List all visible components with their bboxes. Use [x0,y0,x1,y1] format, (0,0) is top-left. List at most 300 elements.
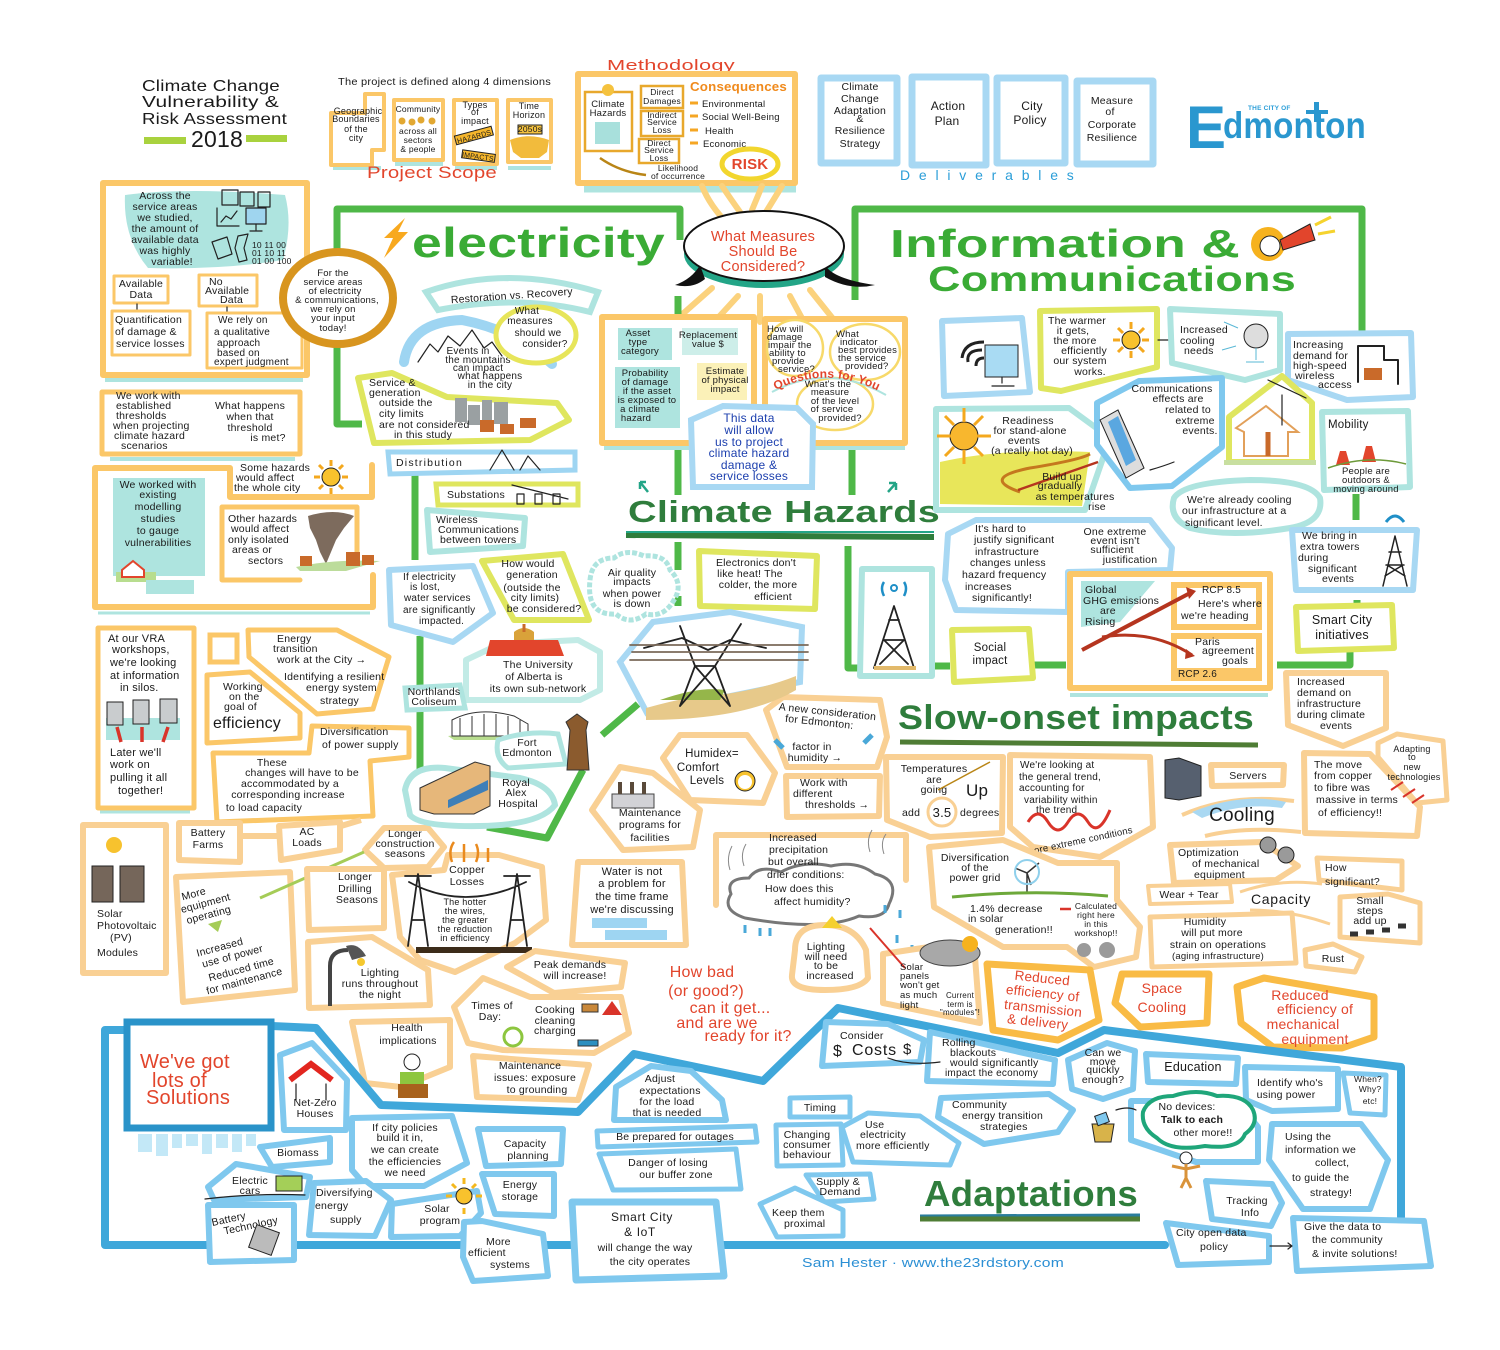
panel: hazards across city: to gauge [137,525,179,537]
panel: high-speed wireless: Increasing [1293,339,1343,351]
panel: how would generation: be considered? [507,603,581,615]
panel: if electricity is lost: If electricity [403,572,456,583]
label: smart city initiatives: Smart City [1312,613,1373,627]
panel: capacity planning: planning [507,1150,549,1162]
label: community energy transition: Community [952,1099,1007,1111]
panel: warmer efficiency: works. [1073,366,1106,378]
panel: service and generation: Service & [369,377,416,389]
label: royal alex hospital [405,762,555,826]
panel: smart city and IoT: will change the way [597,1242,693,1254]
panel: move copper to fibre: massive in terms [1316,794,1398,806]
panel: humidity strain: will put more [1180,927,1243,939]
panel: project scope: & people [400,144,436,154]
label: community energy transition: energy transition [962,1110,1043,1122]
rays from methodology to question bubble [678,186,834,322]
panel: talk behind blue box [1131,1092,1258,1162]
panel: warmer efficiency: our system [1053,355,1107,367]
panel: lighting increased [792,916,868,990]
panel: diversification grid [929,840,1140,967]
icon: tower [860,569,932,676]
panel: humidity strain: Humidity [1184,916,1227,928]
panel: lighting increased: to be [814,960,838,972]
band: distribution [388,450,575,474]
panel: readiness: events [1008,435,1040,447]
panel: hazards across city: areas or [232,544,272,556]
panel: hazards across city [95,460,380,613]
panel: optimization: of mechanical [1192,858,1259,870]
panel: copper losses tower: in efficiency [440,933,490,943]
panel: solar panels light [870,928,980,1023]
panel: warmer efficiency: The warmer [1048,315,1106,327]
panel: diversification grid: generation!! [995,924,1053,936]
label: changing consumer behaviour: behaviour [783,1149,831,1161]
panel: data availability: variable! [151,256,193,268]
panel: humidex [663,735,775,803]
panel: service and generation: are not considered [379,419,470,431]
panel: thresholds: thresholds [116,410,166,422]
panel: hard to justify: changes unless [970,557,1046,569]
band: distribution: Distribution [396,457,462,469]
title: Climate Change [142,78,280,95]
panel: temperatures [886,757,1003,837]
panel: mobility: moving around [1333,484,1399,495]
adaptations frame [105,1008,1401,1245]
panel: energy transition: Energy [277,633,312,645]
panel: hard to justify: It's hard to [975,523,1026,535]
label: cooling: Cooling [1209,805,1275,826]
panel: questions for you: Probability [622,368,668,379]
label: consider costs: Costs [852,1042,897,1059]
panel: reduced efficiency transmission: & delivery [1006,1011,1069,1033]
panel: project scope: IMPACTS [461,152,494,163]
panel: how significant: significant? [1325,876,1380,888]
label: education [1146,1054,1238,1084]
speech bubble: what measures: Should Be [729,244,797,260]
panel: solar panels light: Current [946,991,975,1000]
panel: data availability: 01 10 11 [252,248,286,258]
panel: data availability: expert judgment [214,357,289,368]
panel: readiness: Build up [1042,471,1082,483]
panel: already cooling [1173,480,1320,533]
panel: questions for you: measure [811,387,849,398]
callout: your input circle: of electricity [309,286,362,297]
panel: data availability: Data [130,289,152,301]
panel: deliverables: Plan [935,114,959,128]
panel: increased cooling needs: needs [1184,345,1214,357]
panel: hazards across city: only isolated [228,534,289,546]
panel: solar PV modules: Solar [97,908,123,920]
bubble: no devices: Talk to each [1161,1114,1223,1126]
label: efficiency [207,672,300,743]
panel: increased demand infrastructure: during climate [1297,709,1365,721]
panel: service and generation: outside the [379,397,433,409]
heading: information and communications [890,217,1335,299]
panel: GHG emissions chart: Paris [1195,636,1220,648]
label: northlands coliseum: Coliseum [411,696,457,708]
label: consider costs: Consider [840,1030,884,1042]
panel: wireless communications [427,510,525,552]
heading: electricity: electricity [412,219,666,266]
callout: this data will allow: climate hazard [709,446,789,460]
panel: energy transition: energy system [306,682,377,694]
panel: communications effects phone: effects are [1152,393,1204,405]
label: be prepared: Be prepared for outages [616,1131,734,1143]
panel: methodology: Indirect [647,110,677,120]
label: efficiency: goal of [224,701,257,713]
label: biomass [260,1138,330,1167]
panel: capacity planning: Capacity [504,1138,547,1150]
panel: health implications: implications [379,1035,437,1047]
callout: how bad: can it get... [690,1000,770,1017]
panel: solar PV modules: Modules [97,947,138,959]
callout: how bad: How bad [670,964,734,981]
panel: net-zero houses: Net-Zero [293,1097,337,1109]
callout: how bad: and are we [676,1015,758,1032]
callout: this data will allow: will allow [723,423,774,437]
panel: wireless communications: Wireless [436,514,478,526]
panel: space cooling: Cooling [1138,999,1186,1015]
label: social impact: Social [974,642,1006,654]
panel: new consideration: for Edmonton: [785,713,854,732]
panel: electronics heat [699,551,817,609]
panel: restoration vs recovery: Restoration vs. Recovery [450,286,574,306]
panel: thresholds work [786,776,880,817]
label: danger buffer zone [599,1149,741,1190]
label: rust: Rust [1322,953,1344,965]
callout: your input circle: we rely on [309,304,356,315]
panel: project scope: 2050s [518,124,542,134]
panel: project scope: Geographic [334,106,383,116]
panel: reduced efficiency transmission: efficiency of [1005,982,1080,1005]
panel: water frame: a problem for [598,878,666,890]
panel: university of alberta [466,624,600,700]
label: city open data policy [1166,1223,1292,1265]
logo: City of Edmonton [1186,94,1366,161]
panel: net-zero houses: Houses [297,1108,333,1120]
panel: water frame: Water is not [602,866,662,878]
callout: your input circle: & communications, [295,295,379,306]
panel: questions for you: Replacement [679,330,737,341]
callout: this data will allow [691,406,813,487]
label: fort edmonton [497,714,589,770]
panel: wireless communications: Communications [438,524,519,536]
panel: readiness: gradually [1038,480,1083,492]
panel: lighting increased: will need [804,951,847,963]
panel: hard to justify: infrastructure [975,546,1039,558]
panel: we've got lots of solutions: Solutions [146,1087,230,1109]
band: substations [436,484,578,505]
panel: GHG emissions chart: goals [1222,655,1248,667]
label: use electricity efficiently: electricity [860,1129,907,1141]
panel: hazards across city: We worked with [120,479,196,491]
panel: warmer efficiency: it gets, [1057,325,1089,337]
panel: project scope: Time [519,101,539,111]
callout: this data will allow: damage & [721,458,777,472]
callout: your input circle: For the [317,268,349,279]
panel: readiness: (a really hot day) [991,445,1073,457]
panel: how would generation [482,554,589,620]
panel: VRA workshops: Later we'll [110,747,161,759]
panel: thresholds [102,390,300,459]
label: smart city initiatives: initiatives [1315,628,1369,642]
panel: if city policies: the efficiencies [369,1156,441,1168]
panel: copper losses tower [392,842,546,972]
panel: GHG emissions chart: Rising [1085,616,1115,628]
panel: more equipment operating: for maintenance [205,965,284,997]
panel: adapting to new technologies: new [1403,762,1421,772]
panel: methodology: Health [705,126,734,137]
panel: questions for you: best provides [838,345,897,356]
label: longer construction seasons: Longer [388,828,422,840]
panel: humidity strain: (aging infrastructure) [1172,951,1264,962]
panel: new consideration: humidity → [788,752,842,764]
panel: increased precipitation cloud [716,830,912,953]
panel: warmer efficiency [1040,309,1172,391]
title: Risk Assessment [142,111,287,128]
panel: deliverables: & [856,113,864,125]
label: can we move quickly: move [1090,1056,1116,1068]
label: consider costs: $ [833,1043,842,1060]
panel: questions for you: of the level [811,396,859,407]
icon: tornado [296,512,380,571]
panel: methodology: Service [647,117,677,127]
label: rolling blackouts: Rolling [942,1037,976,1049]
panel: questions for you: of physical [701,375,749,386]
label: keep them proximal [760,1188,843,1237]
panel: data availability: was highly [138,245,191,257]
panel: questions for you: Asset [626,328,651,339]
panel: reduced efficiency mechanical: Reduced [1271,987,1329,1003]
panel: using the information [1269,1124,1388,1209]
panel: energy transition: work at the City → [276,654,366,666]
panel: GHG emissions chart: Here's where [1198,598,1262,610]
panel: deliverables: Climate [842,81,878,93]
panel: diversification grid: 1.4% decrease [970,903,1043,915]
panel: adjust expectations: Adjust [645,1073,675,1085]
panel: how would generation: city limits) [511,592,559,604]
panel: project scope: Project Scope [367,163,497,182]
panel: if electricity is lost: is lost, [410,582,440,593]
panel: battery technology: Battery [211,1210,247,1229]
panel: solar PV modules [83,825,166,973]
panel: readiness: as temperatures [1036,491,1114,503]
panel: health implications [352,1020,450,1098]
title: Vulnerability & [142,94,279,111]
panel: move copper to fibre: of efficiency!! [1318,807,1382,819]
panel: data availability [103,183,307,380]
panel: project scope [331,77,551,182]
panel: lighting at night: the night [359,989,401,1001]
panel: questions for you: type [629,337,647,348]
panel: increased cooling needs: cooling [1180,335,1215,347]
label: longer drilling seasons: Longer [338,871,372,883]
label: diversification and load capacity: changes will have to be [245,767,359,779]
cloud: air quality [590,552,678,620]
bubble: what measures: measures [507,316,553,327]
label: northlands coliseum [405,685,532,740]
panel: questions for you: of service [811,404,853,415]
icon: person [1172,1152,1200,1188]
panel: deliverables: Adaptation [834,105,886,117]
panel: water frame [572,862,686,945]
label: diversification and load capacity: These [257,757,287,769]
callout: your input circle: your input [311,313,355,324]
label: danger buffer zone: Danger of losing [628,1157,708,1169]
panel: high-speed wireless [1288,333,1413,400]
panel: university of alberta: its own sub-network [490,683,587,695]
label: timing: Timing [804,1102,836,1114]
panel: reduced efficiency mechanical [1237,978,1374,1048]
panel: GHG emissions chart: we're heading [1180,610,1249,622]
speech bubble: what measures: Considered? [721,259,805,275]
panel: humidity strain [1150,913,1296,967]
panel: energy storage: Energy [503,1179,538,1191]
panel: if city policies: build it in, [377,1132,423,1144]
bubble: what measures: should we [515,328,562,339]
label: electric cars: Electric [232,1175,268,1187]
panel: smart city and IoT [572,1202,724,1280]
panel: deliverables: of [1105,106,1115,118]
panel: diversification grid: power grid [949,872,1001,884]
label: timing [790,1097,850,1117]
label: royal alex hospital: Royal [502,777,530,789]
panel: house antenna [1224,376,1316,465]
panel: optimization [1170,837,1298,883]
text: one extreme event: justification [1102,554,1157,566]
label: diversification and load capacity: of power supply [322,739,399,751]
panel: times of day: charging [534,1025,576,1037]
panel: energy transition: Identifying a resilient [284,671,384,683]
panel: methodology: Damages [643,96,681,106]
panel: if city policies: we can create [370,1144,439,1156]
label: identify who is using power [1245,1067,1338,1111]
panel: VRA workshops: we're looking [109,657,176,669]
panel: increased precipitation cloud: Increased [769,832,817,844]
label: can we move quickly: Can we [1085,1047,1121,1059]
panel: methodology: Loss [653,125,671,135]
label: peak demands [507,951,625,993]
panel: VRA workshops: at information [110,670,179,682]
panel: mountains: what happens [457,371,522,382]
label: can we move quickly: quickly [1086,1064,1120,1076]
panel: GHG emissions chart: RCP 2.6 [1178,669,1217,680]
panel: smart city and IoT: Smart City [611,1210,673,1224]
panel: questions for you: ability to [769,348,806,359]
label: longer construction seasons [365,828,444,868]
panel: give the data: Give the data to [1304,1221,1381,1233]
panel: if electricity is lost: impacted. [419,616,464,627]
panel: project scope: city [349,133,363,143]
label: biomass: Biomass [277,1147,319,1159]
label: use electricity efficiently [842,1113,959,1165]
title [142,78,287,152]
panel: thresholds work: different [793,788,833,800]
panel: university of alberta: The University [503,659,573,671]
panel: deliverables: Resilience [1087,132,1137,144]
label: keep them proximal: proximal [784,1218,825,1230]
panel: reduced efficiency mechanical: efficiency of [1277,1001,1353,1017]
panel: deliverables: Resilience [835,125,885,137]
panel: battery technology: Technology [223,1214,280,1238]
panel: increased precipitation cloud: drier conditions: [767,869,845,881]
panel: questions for you: hazard [621,413,651,424]
panel: methodology: Likelihood [658,163,698,173]
callout: your input circle: today! [319,323,347,334]
panel: diversifying energy supply: Diversifying [316,1187,373,1199]
panel: maintenance issues: to grounding [507,1084,567,1096]
panel: solar panels light: as much [900,990,937,1001]
panel: VRA workshops: work on [109,759,150,771]
panel: project scope: across all [399,126,437,136]
panel: temperatures: Up [966,781,988,800]
panel: communications effects phone: related to [1165,404,1211,416]
label: be prepared [597,1126,757,1147]
panel: small steps: Small [1356,895,1384,907]
panel: university of alberta: of Alberta is [505,671,563,683]
panel: new consideration: A new consideration [778,701,877,723]
panel: how would generation: (outside the [503,582,561,594]
panel: increased precipitation cloud: but overall [768,856,819,868]
panel: questions for you: a climate [620,404,660,415]
panel: methodology [578,57,796,189]
panel: optimization: Optimization [1178,847,1239,859]
panel: battery technology [208,1203,294,1262]
panel: maintenance issues: Maintenance [499,1060,561,1072]
panel: using the information: strategy! [1310,1187,1352,1199]
panel: mountains: in the city [468,380,512,391]
panel: energy storage [482,1174,554,1216]
panel: adapting to new technologies: Adapting [1393,744,1431,754]
panel: data availability: We rely on [218,315,268,326]
callout: your input circle [283,252,393,344]
icon: silos [107,699,177,725]
label: consider costs: $ [903,1041,912,1058]
panel: project scope: Community [396,104,441,114]
logo: City of Edmonton: THE CITY OF [1248,105,1291,112]
panel: how significant: How [1325,862,1347,874]
panel: questions for you: provide [772,356,805,367]
label: changing consumer behaviour: consumer [783,1139,831,1151]
heading: climate hazards: Climate Hazards [628,494,940,529]
panel: increased demand infrastructure: demand on [1297,687,1351,699]
panel: project scope: Boundaries [332,114,380,124]
panel: extra towers [1292,516,1417,590]
label: royal alex hospital: Hospital [498,798,538,810]
panel: solar panels light: "modules"! [940,1008,980,1017]
panel: energy transition: transition [273,643,318,655]
panel: move copper to fibre: from copper [1314,770,1373,782]
panel: questions for you: value $ [692,339,725,350]
speech bubble: what measures: What Measures [711,229,815,245]
label: longer construction seasons: construction [375,838,435,850]
panel: extra towers: during [1298,552,1328,564]
panel: mountains: Events in [447,346,489,357]
panel: hazards across city: existing [139,489,177,501]
panel: data availability: Across the [139,190,191,202]
label: capacity: Capacity [1251,891,1311,907]
panel: increased cooling needs: Increased [1180,324,1228,336]
panel: data availability: based on [217,348,260,359]
label: efficiency: Working [223,681,263,693]
panel: methodology: Social Well-Being [702,112,780,123]
panel: warmer efficiency: efficiently [1061,345,1107,357]
label: diversification and load capacity: to load capacity [226,802,303,814]
panel: solar panels light: light [900,1000,919,1011]
panel: already cooling: We're already cooling [1187,494,1292,506]
connectors between small load boxes [240,820,361,836]
label: rolling blackouts: blackouts [950,1047,996,1059]
label: longer drilling seasons [307,869,384,930]
